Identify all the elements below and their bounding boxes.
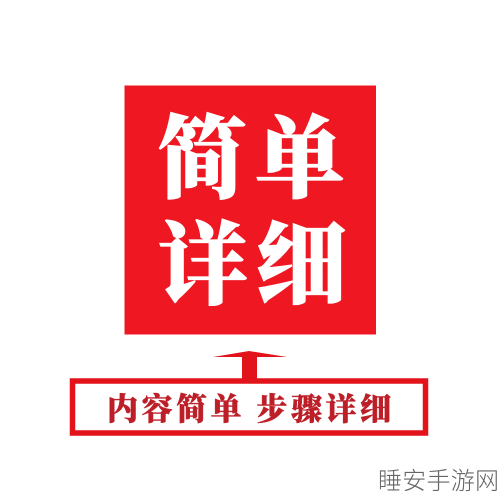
watermark: 睡安手游网 <box>378 468 499 495</box>
heading: 详细: 详细 <box>158 217 346 316</box>
heading: 简单: 简单 <box>157 111 345 210</box>
callout text: 内容简单 步骤详细 <box>107 392 391 427</box>
panel: red square <box>124 86 376 334</box>
callout box <box>72 381 426 433</box>
arrow: pointing up to the square <box>213 351 287 380</box>
